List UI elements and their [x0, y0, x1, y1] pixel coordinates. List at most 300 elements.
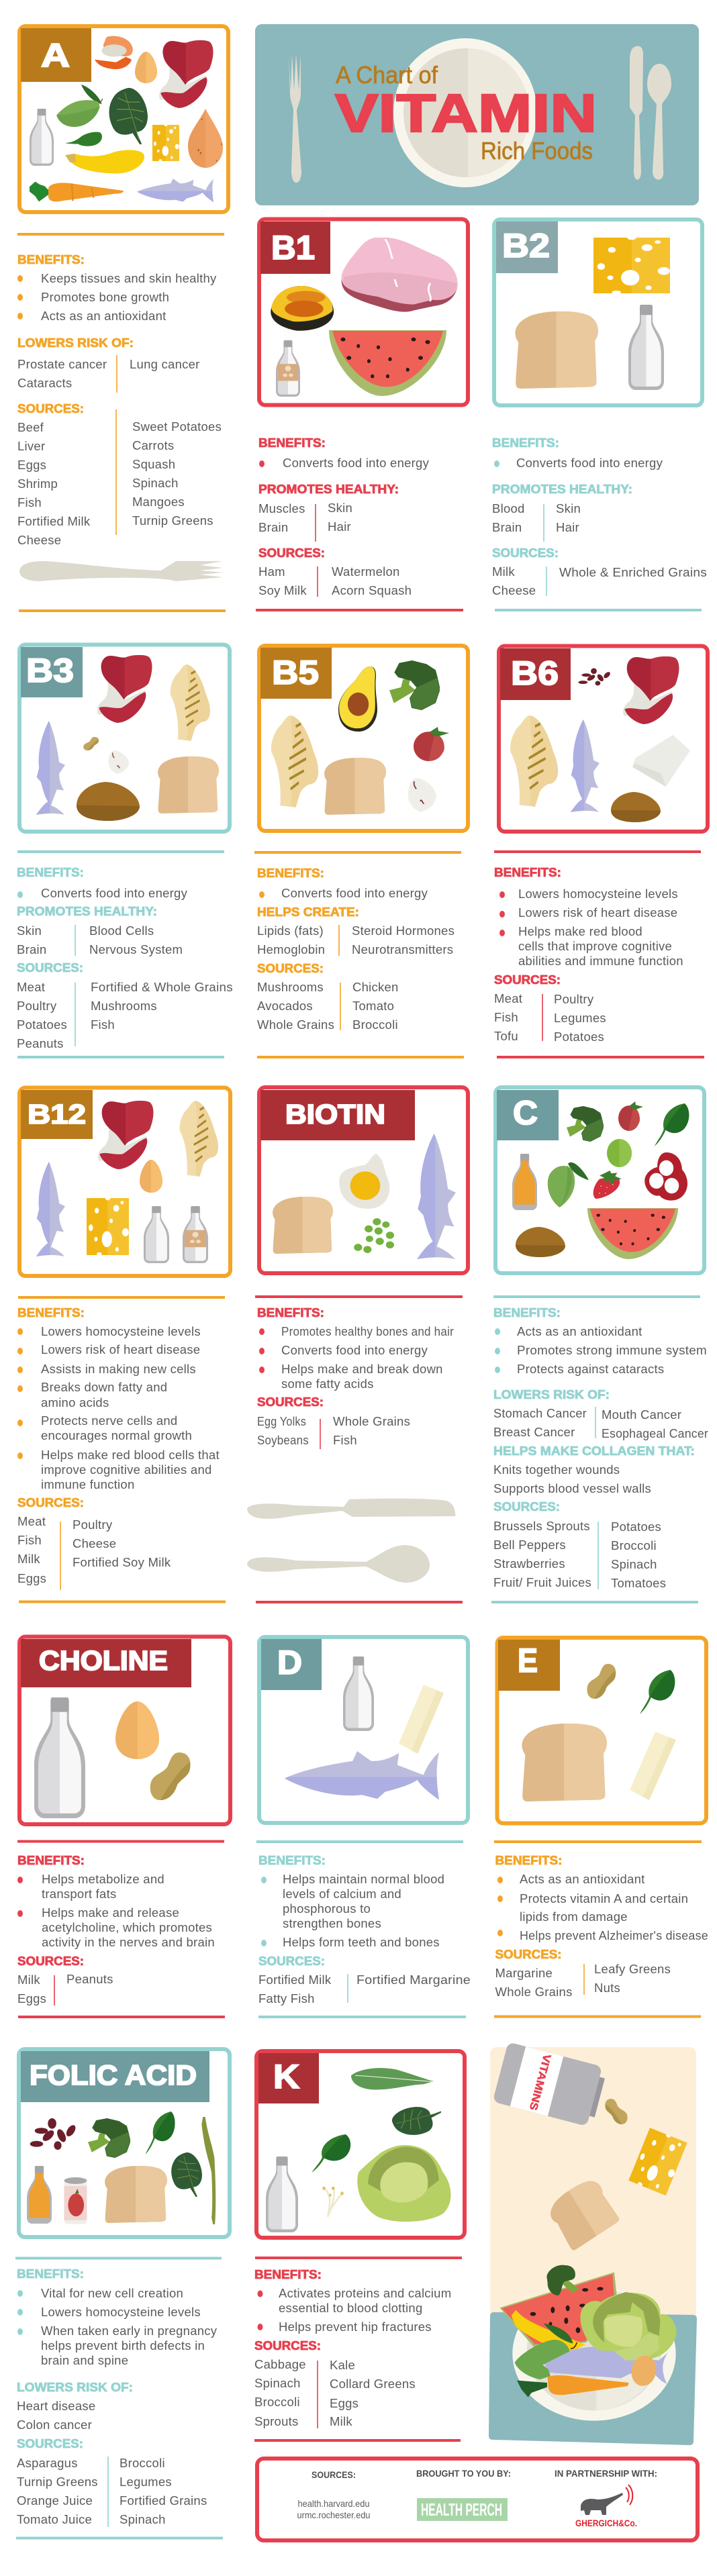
header tile: B5 [260, 648, 332, 699]
icon: peanut [83, 737, 99, 750]
list: benefits: Keeps tissues and skin healthy [41, 271, 217, 285]
icon: mushroom [108, 750, 129, 774]
list: benefits [499, 887, 683, 968]
list: promotes healthy: Brain [258, 520, 288, 534]
footer sources: SOURCES: [312, 2469, 356, 2480]
list: sources: Fortified Soy Milk [73, 1555, 171, 1569]
heading: sources: SOURCES: [17, 402, 84, 415]
icon: kidney beans [578, 668, 612, 685]
list: promotes healthy: Blood Cells [89, 924, 154, 938]
text: vitamin K facts [254, 2258, 462, 2440]
icon: asparagus [203, 2117, 214, 2224]
list: sources: Tofu [494, 1029, 518, 1043]
list: benefits [497, 1872, 708, 1942]
list: sources: Legumes [120, 2475, 172, 2489]
header tile: K: K [273, 2058, 299, 2095]
list: lowers risk: Colon cancer [17, 2418, 92, 2432]
list: sources: Cheese [17, 533, 61, 547]
heading: benefits: BENEFITS: [257, 866, 324, 880]
icon: egg [115, 1701, 159, 1759]
list: benefits: transport fats [42, 1887, 116, 1901]
text: vitamin D facts [256, 1842, 471, 2017]
list: sources: Squash [132, 457, 175, 471]
icon: fish [544, 2346, 668, 2384]
heading: sources: SOURCES: [17, 1954, 84, 1968]
list: benefits: activity in the nerves and brain [42, 1935, 215, 1949]
heading: sources: SOURCES: [254, 2339, 321, 2352]
list: lowers risk: Cataracts [17, 376, 72, 390]
list: sources: Asparagus [17, 2456, 78, 2470]
list: sources: Broccoli [120, 2456, 165, 2470]
header tile: B2: B2 [502, 227, 550, 264]
list: benefits: Protects against cataracts [517, 1362, 664, 1376]
list: benefits: abilities and immune function [518, 954, 683, 968]
icon: mango [56, 85, 103, 127]
header tile: FOLIC ACID: FOLIC ACID [30, 2059, 197, 2091]
header tile: CHOLINE: CHOLINE [39, 1645, 168, 1676]
list: benefits: Helps make red blood cells that [41, 1448, 220, 1462]
icon: fork horizontal [19, 561, 223, 581]
icon: broccoli [546, 2265, 579, 2295]
heading: collagen: HELPS MAKE COLLAGEN THAT: [493, 1444, 695, 1458]
heading: sources: SOURCES: [258, 546, 325, 560]
list: sources: Watermelon [332, 564, 400, 579]
heading: benefits: BENEFITS: [17, 866, 84, 879]
list: sources: Strawberries [493, 1556, 565, 1571]
list: sources: Broccoli [611, 1538, 657, 1552]
list: benefits: Lowers risk of heart disease [518, 905, 677, 920]
list: sources: Egg Yolks [257, 1414, 306, 1428]
list: promotes healthy: Blood [492, 501, 525, 515]
icon: squash [65, 150, 144, 174]
header tile: B2 [496, 221, 558, 273]
list: sources: Whole Grains [333, 1414, 410, 1428]
list: sources: Spinach [254, 2376, 301, 2390]
list: collagen: Supports blood vessel walls [493, 1481, 651, 1495]
heading: sources: SOURCES: [17, 961, 83, 975]
list: sources: Poultry [554, 992, 594, 1006]
list: benefits: some fatty acids [281, 1377, 374, 1391]
list: sources: Eggs [17, 1571, 46, 1585]
icon: fish vertical [571, 720, 600, 812]
list: sources: Cabbage [254, 2357, 306, 2371]
heading: promotes healthy: PROMOTES HEALTHY: [258, 483, 399, 496]
list: promotes healthy: Hair [328, 519, 351, 534]
list: benefits: Helps make and break down [281, 1362, 443, 1376]
list: benefits: essential to blood clotting [279, 2301, 423, 2315]
list: sources: Eggs [17, 458, 46, 472]
list: benefits: amino acids [41, 1395, 109, 1409]
list: benefits: Vital for new cell creation [41, 2286, 183, 2300]
list: benefits [17, 271, 217, 323]
list: benefits: lipids from damage [520, 1910, 628, 1924]
header tile: B6: B6 [511, 654, 559, 692]
title: Rich Foods [481, 137, 593, 164]
icon: cabbage [580, 2292, 677, 2361]
list: sources [17, 409, 222, 547]
icon: falling peanut [605, 2099, 628, 2124]
list: sources: Spinach [611, 1557, 657, 1571]
footer brought to you by: HEALTH PERCH [421, 2499, 502, 2520]
icon: bread [105, 2166, 167, 2223]
heading: benefits: BENEFITS: [258, 436, 326, 450]
header tile: C [497, 1090, 559, 1140]
icon: peanut [587, 1664, 616, 1699]
panel: biotin food card [259, 1087, 468, 1273]
icon: potato [611, 792, 661, 822]
list: benefits: encourages normal growth [41, 1428, 192, 1442]
icon: fish vertical [417, 1134, 456, 1259]
list: sources: Poultry [17, 999, 57, 1013]
list: sources [492, 564, 707, 597]
list: sources [17, 2456, 207, 2527]
list: sources [257, 980, 399, 1032]
list: sources: Spinach [120, 2512, 166, 2526]
icon: chicken [271, 715, 318, 807]
list: sources [493, 1519, 666, 1590]
footer sources: health.harvard.edu [298, 2498, 369, 2509]
list: lowers risk [17, 355, 200, 393]
heading: benefits: BENEFITS: [492, 436, 559, 450]
title [335, 61, 597, 164]
footer partnership [555, 2468, 657, 2528]
icon: potato [516, 1227, 565, 1257]
list: lowers risk: Mouth Cancer [602, 1407, 681, 1422]
list: sources [494, 991, 606, 1044]
list: benefits: Helps form teeth and bones [283, 1935, 440, 1949]
icon: knife [630, 46, 643, 180]
icon: egg [135, 52, 157, 83]
list: benefits: Converts food into energy [281, 1343, 428, 1357]
list: benefits: Protects nerve cells and [41, 1414, 177, 1428]
footer brought to you by [416, 2468, 511, 2521]
heading: sources: SOURCES: [495, 1948, 561, 1961]
heading: lowers risk: LOWERS RISK OF: [17, 2381, 133, 2394]
icon: orange juice [512, 1154, 537, 1210]
icon: tofu [632, 735, 690, 787]
list: sources: Fish [494, 1010, 518, 1024]
list: sources: Shrimp [17, 477, 58, 491]
list: sources: Milk [330, 2414, 352, 2428]
list: sources: Soybeans [257, 1433, 309, 1447]
list: benefits: Acts as an antioxidant [517, 1324, 642, 1338]
icon: spinach [640, 1670, 675, 1714]
heading: benefits: BENEFITS: [17, 1306, 85, 1320]
list: sources: Potatoes [554, 1030, 604, 1044]
list: benefits [261, 1872, 444, 1949]
icon: watermelon slice [499, 2272, 617, 2347]
header tile: C: C [513, 1094, 538, 1132]
list: sources: Potatoes [17, 1018, 67, 1032]
text: vitamin B2 facts [492, 436, 707, 610]
icon: steak [97, 655, 152, 723]
icon: cheese [152, 123, 179, 162]
icon: watermelon [587, 1208, 678, 1259]
list: lowers risk: Esophageal Cancer [602, 1426, 708, 1440]
list: sources: Nuts [594, 1981, 620, 1995]
list: sources: Acorn Squash [332, 583, 412, 597]
heading: sources: SOURCES: [493, 1500, 560, 1514]
icon: fork [289, 54, 301, 183]
list: lowers risk: Prostate cancer [17, 357, 107, 371]
list: collagen: Knits together wounds [493, 1463, 620, 1477]
header tile: B6 [500, 648, 571, 700]
footer partnership: GHERGICH&Co. [575, 2518, 637, 2528]
icon: soy milk [276, 340, 300, 397]
list: lowers risk: Heart disease [17, 2399, 95, 2413]
icon: spoon horizontal [247, 1545, 430, 1583]
icon: spoon [647, 64, 671, 180]
list: sources: Meat [17, 980, 45, 994]
icon: vitamin bottle [493, 2042, 608, 2128]
icon: tomato [414, 727, 449, 761]
header tile: B12 [21, 1090, 93, 1139]
icon: fish vertical [36, 721, 65, 815]
list: sources: Whole Grains [495, 1985, 573, 1999]
icon: knife horizontal [247, 1499, 455, 1519]
header tile: A: A [41, 38, 70, 74]
icon: mango leaf [544, 2324, 573, 2344]
heading: benefits: BENEFITS: [494, 866, 561, 879]
header tile: A [21, 28, 91, 82]
list: promotes healthy: Muscles [258, 501, 305, 515]
list: sources [258, 1973, 471, 2005]
header tile: B3 [21, 647, 83, 697]
footer brought to you by: BROUGHT TO YOU BY: [416, 2468, 511, 2479]
heading: sources: SOURCES: [492, 546, 559, 560]
list: promotes healthy: Nervous System [89, 942, 183, 956]
list: sources: Poultry [73, 1518, 113, 1532]
heading: promotes healthy: PROMOTES HEALTHY: [492, 483, 632, 496]
icon: milk bottle [266, 2157, 298, 2232]
list: benefits: Helps maintain normal blood [283, 1872, 444, 1886]
list: sources: Eggs [17, 1991, 46, 2005]
list: sources: Fatty Fish [258, 1991, 315, 2005]
panel: vitamin K food card [256, 2051, 465, 2238]
icon: mango [548, 1162, 589, 1207]
list: promotes healthy: Brain [492, 520, 522, 534]
list: sources: Broccoli [352, 1018, 398, 1032]
list: benefits: Converts food into energy [283, 456, 430, 470]
list: sources: Turnip Greens [17, 2475, 98, 2489]
list: sources: Fish [333, 1433, 357, 1447]
list: sources: Milk [17, 1552, 40, 1566]
icon: sweet potato [188, 109, 223, 168]
header tile: D [261, 1639, 322, 1690]
icon: sprouts [322, 2187, 344, 2217]
icon: peas [354, 1218, 394, 1253]
header tile: B3: B3 [26, 652, 74, 689]
list: sources [17, 980, 233, 1050]
text: vitamin A facts [17, 234, 226, 611]
heading: benefits: BENEFITS: [17, 253, 85, 266]
list: benefits: Acts as an antioxidant [41, 309, 166, 323]
list: benefits: Helps prevent Alzheimer's disease [520, 1928, 708, 1942]
header tile: BIOTIN [260, 1090, 415, 1140]
icon: leafy green [351, 2068, 434, 2089]
list: benefits [495, 1324, 707, 1376]
panel: choline food card [19, 1636, 230, 1824]
list: sources: Sweet Potatoes [132, 419, 222, 434]
list: sources: Peanuts [17, 1036, 64, 1050]
icon: butter [399, 1685, 444, 1754]
list: sources: Fortified Milk [17, 514, 91, 528]
heading: benefits: BENEFITS: [493, 1306, 561, 1320]
icon: lime [607, 1139, 632, 1167]
list: sources: Tomato Juice [17, 2512, 92, 2526]
list: lowers risk: Breast Cancer [493, 1425, 575, 1439]
list: helps create: Steroid Hormones [352, 924, 455, 938]
text: vitamin E facts [494, 1842, 708, 2016]
icon: milk bottle [628, 305, 664, 390]
header tile: BIOTIN: BIOTIN [285, 1099, 385, 1130]
list: promotes healthy: Skin [556, 501, 581, 515]
heading: sources: SOURCES: [257, 1395, 324, 1409]
list: sources: Leafy Greens [594, 1962, 671, 1976]
icon: bread [522, 1724, 607, 1801]
list: sources: Kale [330, 2358, 355, 2372]
list: sources: Carrots [132, 438, 174, 452]
list: sources: Brussels Sprouts [493, 1519, 590, 1533]
icon: falling bread [544, 2175, 622, 2252]
list: sources: Soy Milk [258, 583, 307, 597]
list: lowers risk: Lung cancer [130, 357, 200, 371]
icon: milk bottle [34, 1697, 85, 1818]
list: sources: Spinach [132, 476, 179, 490]
list: sources: Milk [492, 564, 515, 579]
icon: butter [630, 1732, 676, 1800]
icon: bell pepper [644, 1152, 687, 1201]
panel: vitamin B12 food card [19, 1087, 230, 1276]
list: benefits: strengthen bones [283, 1916, 381, 1930]
list: benefits [17, 1872, 215, 1949]
icon: cabbage [357, 2145, 451, 2222]
list: promotes healthy: Skin [17, 924, 42, 938]
list: sources: Mushrooms [257, 980, 324, 994]
heading: sources: SOURCES: [17, 2437, 83, 2450]
text: biotin facts [247, 1297, 463, 1602]
icon: carrot [30, 182, 124, 201]
list: benefits: Lowers risk of heart disease [41, 1342, 200, 1356]
list: sources: Fruit/ Fruit Juices [493, 1575, 591, 1589]
list: sources: Cheese [492, 583, 536, 597]
list: sources: Fish [17, 1533, 42, 1547]
list: sources [258, 564, 412, 597]
icon: squash [512, 2310, 585, 2352]
icon: chicken [171, 664, 210, 741]
list: sources: Cheese [73, 1536, 116, 1550]
footer sources: urmc.rochester.edu [297, 2510, 371, 2520]
icon: steak [98, 1101, 153, 1169]
icon: fish vertical [36, 1162, 65, 1256]
list: lowers risk [493, 1406, 708, 1440]
heading: benefits: BENEFITS: [495, 1854, 563, 1867]
list: sources: Margarine [495, 1966, 553, 1980]
icon: carrot [517, 2375, 629, 2397]
icon: mushroom [408, 778, 436, 812]
header tile: FOLIC ACID [21, 2051, 209, 2102]
icon: falling cheese [628, 2126, 688, 2196]
list: benefits [17, 1324, 220, 1491]
footer sources [297, 2469, 371, 2520]
heading: sources: SOURCES: [257, 962, 324, 975]
list: benefits: brain and spine [41, 2353, 128, 2367]
list: benefits: Helps prevent hip fractures [279, 2320, 432, 2334]
list: sources: Fortified Margarine [356, 1973, 471, 1987]
list: benefits: cells that improve cognitive [518, 939, 672, 953]
panel: vitamin B1 food card [259, 219, 468, 405]
list: sources: Legumes [554, 1011, 606, 1025]
list: sources: Sprouts [254, 2414, 299, 2428]
icon: broccoli [88, 2119, 130, 2157]
icon: ham [341, 238, 457, 312]
list: benefits: phosphorous to [283, 1901, 371, 1916]
panel: vitamin B6 food card [499, 646, 708, 832]
text: vitamin B12 facts [17, 1297, 226, 1601]
text: choline facts [17, 1842, 225, 2017]
list: sources: Peanuts [66, 1972, 113, 1986]
panel: footer credits [257, 2459, 698, 2540]
header tile: B1: B1 [271, 229, 315, 266]
list: sources: Whole Grains [257, 1018, 334, 1032]
heading: benefits: BENEFITS: [17, 1854, 85, 1867]
list: sources: Mangoes [132, 495, 185, 509]
icon: strawberry [593, 1171, 622, 1199]
icon: mango [515, 2340, 577, 2379]
list: collagen [493, 1463, 651, 1495]
list: sources: Orange Juice [17, 2493, 93, 2508]
icon: collard greens [392, 2107, 441, 2135]
list: lowers risk: Stomach Cancer [493, 1406, 587, 1420]
list: benefits [258, 2286, 451, 2334]
list: sources [257, 1414, 410, 1449]
icon: bread [273, 1197, 333, 1254]
list: helps create: Neurotransmitters [352, 942, 453, 956]
header tile: B1 [260, 221, 330, 274]
heading: lowers risk: LOWERS RISK OF: [493, 1388, 610, 1401]
list: sources: Broccoli [254, 2395, 300, 2409]
icon: bread [158, 756, 219, 813]
plate of food [499, 2265, 677, 2421]
panel: hero title card [255, 24, 699, 205]
header tile: E: E [518, 1642, 538, 1679]
heading: promotes healthy: PROMOTES HEALTHY: [17, 905, 157, 918]
icon: egg [140, 1160, 162, 1193]
panel: vitamin B3 food card [19, 644, 230, 832]
panel: vitamin B5 food card [259, 646, 468, 831]
list: sources: Chicken [352, 980, 399, 994]
list: sources: Fortified Milk [258, 1973, 332, 1987]
list: benefits: improve cognitive abilities and [41, 1463, 212, 1477]
icon: bread [515, 311, 598, 389]
list: benefits: Helps make red blood [518, 924, 642, 938]
list: helps create: Lipids (fats) [257, 924, 324, 938]
panel: vitamin A food card [19, 26, 228, 212]
list: sources [17, 1514, 171, 1590]
icon: soy milk [183, 1206, 208, 1263]
icon: potato [77, 782, 140, 821]
list: sources: Mushrooms [91, 999, 157, 1013]
heading: benefits: BENEFITS: [258, 1854, 326, 1867]
list: helps create: Hemoglobin [257, 942, 325, 956]
heading: sources: SOURCES: [258, 1954, 325, 1968]
icon: fried egg [339, 1154, 389, 1209]
list: sources: Meat [494, 991, 522, 1005]
list: sources: Fortified & Whole Grains [91, 980, 233, 994]
icon: kidney beans [30, 2118, 77, 2150]
text: folic acid facts [15, 2258, 223, 2538]
list: sources: Fish [91, 1018, 115, 1032]
